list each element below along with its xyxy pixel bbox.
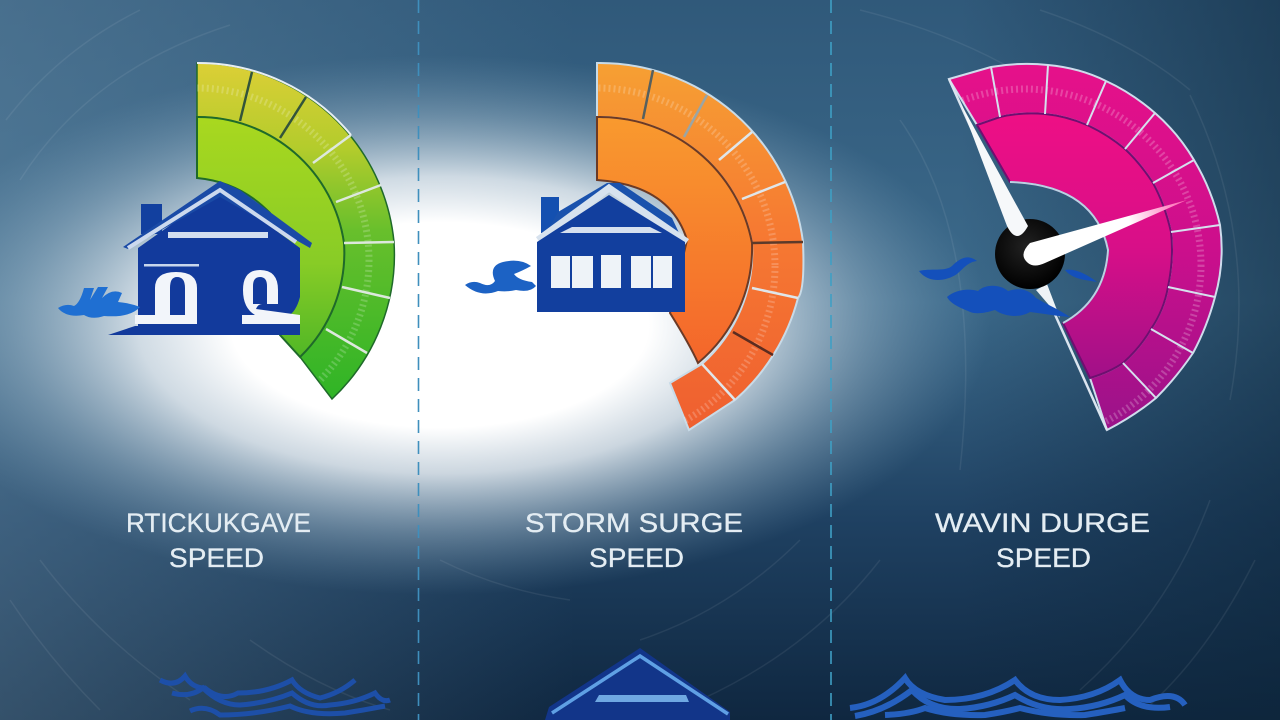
panel: green gauge with house — [58, 62, 396, 400]
label: left gauge: SPEED — [169, 543, 264, 573]
house two gable bar — [560, 227, 662, 233]
panel: orange gauge with house — [465, 62, 804, 432]
gauge: pink inner highlight — [1010, 182, 1108, 323]
gauge: orange outer band — [597, 63, 803, 430]
gauge: pink scale dashes — [961, 86, 1204, 424]
label: right gauge — [935, 508, 1150, 573]
gauge: green outer highlight — [197, 63, 351, 135]
gauge: orange inner band — [597, 117, 752, 363]
house one chimney — [141, 204, 162, 234]
label: left gauge: RTICKUKGAVE — [126, 508, 311, 538]
gauge: orange scale dashes — [598, 84, 778, 424]
house one gable bar — [168, 232, 268, 238]
icon: house one — [58, 181, 312, 335]
icon: bottom right waves — [850, 678, 1185, 716]
house one roof highlight — [128, 190, 296, 248]
house two body — [537, 195, 685, 312]
house two roof — [550, 183, 680, 235]
label: right gauge: SPEED — [996, 543, 1091, 573]
house one right door — [242, 270, 300, 324]
gauge: pink left edge — [949, 79, 1107, 430]
gauge: green segment ticks — [240, 72, 394, 353]
house two windows — [551, 255, 672, 288]
house two chimney — [541, 197, 559, 233]
needle: lower tail — [1036, 284, 1060, 318]
icon: house two — [465, 183, 687, 312]
gauge: pink outer band — [949, 64, 1222, 430]
gauge: pink segment ticks — [991, 65, 1220, 398]
label: right gauge: WAVIN DURGE — [935, 508, 1150, 538]
house two wave — [465, 261, 536, 293]
needle: hub — [995, 219, 1065, 289]
label: centre gauge: STORM SURGE — [525, 508, 743, 538]
needle: right white pointer — [1023, 200, 1187, 266]
house two roof highlight — [538, 188, 687, 242]
house one roof — [123, 181, 312, 249]
gauge: green inner band — [197, 117, 344, 357]
house one lintel — [144, 264, 199, 266]
gauge: pink inner band — [977, 113, 1172, 378]
house one left door — [135, 272, 197, 324]
label: centre gauge: SPEED — [589, 543, 684, 573]
divider: right dashed line — [830, 0, 832, 720]
icon: bottom centre roof — [545, 648, 730, 720]
gauge: green outer band — [197, 63, 394, 399]
panel: pink gauge with needles — [919, 62, 1223, 432]
icon: pink waves — [919, 257, 1097, 317]
divider: left dashed line — [418, 0, 420, 720]
icon: bottom left waves — [160, 676, 390, 715]
gauge: orange segment ticks — [643, 70, 803, 400]
house one wave — [58, 287, 140, 318]
gauge: green scale dashes — [197, 84, 372, 384]
needle: left white pointer — [960, 102, 1028, 236]
house one body — [108, 190, 300, 335]
label: left gauge — [126, 508, 311, 573]
label: centre gauge — [525, 508, 743, 573]
